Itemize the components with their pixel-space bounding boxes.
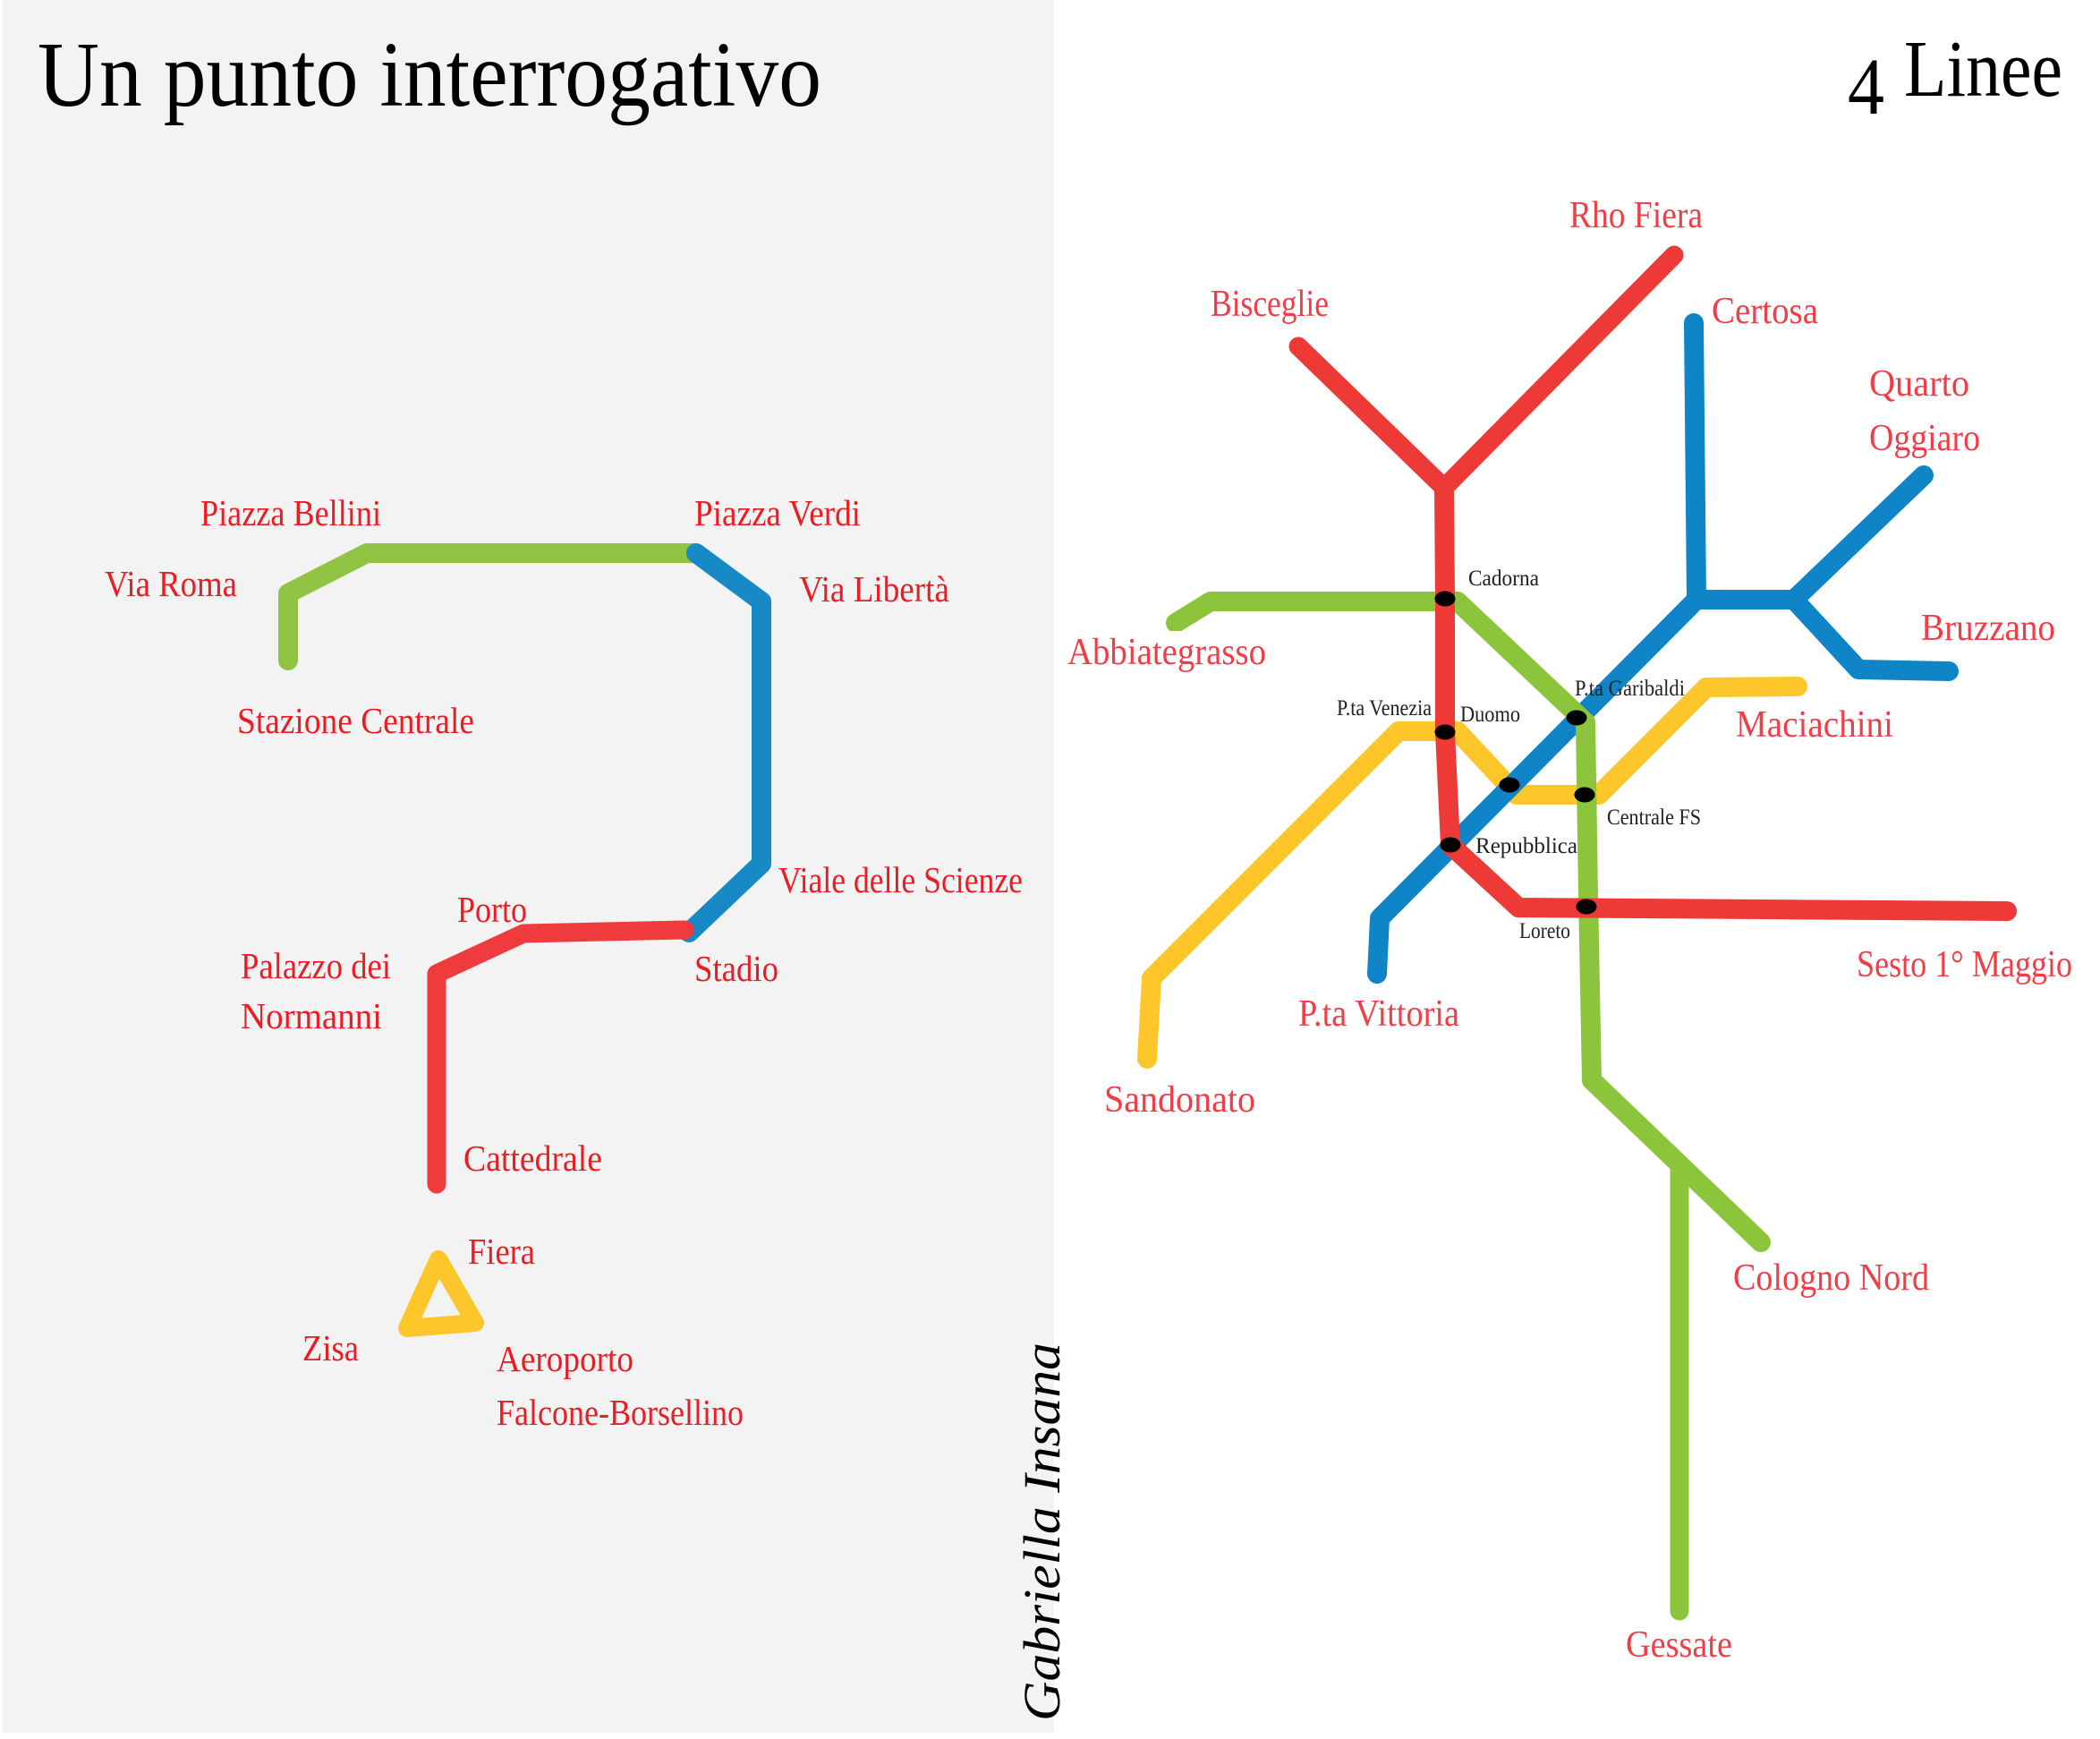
station labels: Normanni (241, 995, 382, 1036)
station labels: Cattedrale (463, 1138, 602, 1179)
station labels: Falcone-Borsellino (497, 1392, 744, 1433)
station labels: Fiera (468, 1231, 535, 1272)
title: 4 Linee: Linee (1904, 25, 2062, 114)
terminus labels: Cologno Nord (1733, 1257, 1929, 1299)
diagram: metro map with 4 lines (1067, 195, 2072, 1666)
terminus labels: Gessate (1626, 1624, 1732, 1666)
interchange labels: Centrale FS (1607, 806, 1701, 830)
interchange labels (1337, 567, 1701, 943)
station labels (105, 492, 1023, 1433)
interchange labels: P.ta Garibaldi (1575, 677, 1685, 701)
station labels: Stazione Centrale (237, 700, 474, 741)
station labels: Aeroporto (497, 1338, 633, 1379)
interchange labels: Cadorna (1468, 567, 1539, 591)
terminus labels: Bisceglie (1211, 284, 1329, 325)
station labels: Viale delle Scienze (778, 859, 1023, 900)
title: 4 Linee: 4 (1848, 43, 1884, 132)
terminus labels: Certosa (1712, 291, 1818, 332)
panel: left grey background (3, 0, 1054, 1733)
terminus labels: P.ta Vittoria (1298, 993, 1459, 1035)
signature: Gabriella Insana: Gabriella Insana (1013, 1343, 1071, 1721)
terminus labels: Maciachini (1736, 704, 1893, 746)
yellow metro line (1147, 686, 1798, 1059)
terminus labels: Abbiategrasso (1067, 632, 1266, 673)
station labels: Palazzo dei (241, 945, 391, 986)
terminus labels: Bruzzano (1921, 608, 2055, 649)
green metro line (1159, 601, 1761, 1611)
interchange labels: Duomo (1460, 703, 1520, 727)
station labels: Via Roma (105, 563, 237, 604)
station labels: Piazza Bellini (200, 492, 381, 533)
terminus labels: Sandonato (1104, 1079, 1255, 1121)
green line segment (288, 553, 693, 661)
yellow triangle (407, 1259, 475, 1328)
station labels: Porto (457, 889, 527, 930)
blue metro line (1377, 323, 1949, 974)
terminus labels: Oggiaro (1869, 418, 1980, 459)
interchange labels: Repubblica (1475, 834, 1577, 858)
station labels: Via Libertà (799, 568, 949, 610)
diagram: question mark network (105, 492, 1023, 1433)
interchange labels: Loreto (1519, 919, 1570, 943)
station labels: Piazza Verdi (694, 492, 861, 533)
title: Un punto interrogativo: Un punto interrogativo (38, 23, 821, 126)
red metro line (1298, 255, 2007, 911)
red line segment (437, 930, 684, 1184)
terminus labels: Quarto (1869, 363, 1969, 405)
terminus labels: Rho Fiera (1569, 195, 1703, 236)
station labels: Zisa (302, 1327, 359, 1368)
blue line segment (689, 553, 761, 933)
interchange labels: P.ta Venezia (1337, 696, 1432, 720)
interchange dots (1435, 591, 1596, 915)
station labels: Stadio (694, 948, 778, 989)
terminus labels (1067, 195, 2072, 1666)
